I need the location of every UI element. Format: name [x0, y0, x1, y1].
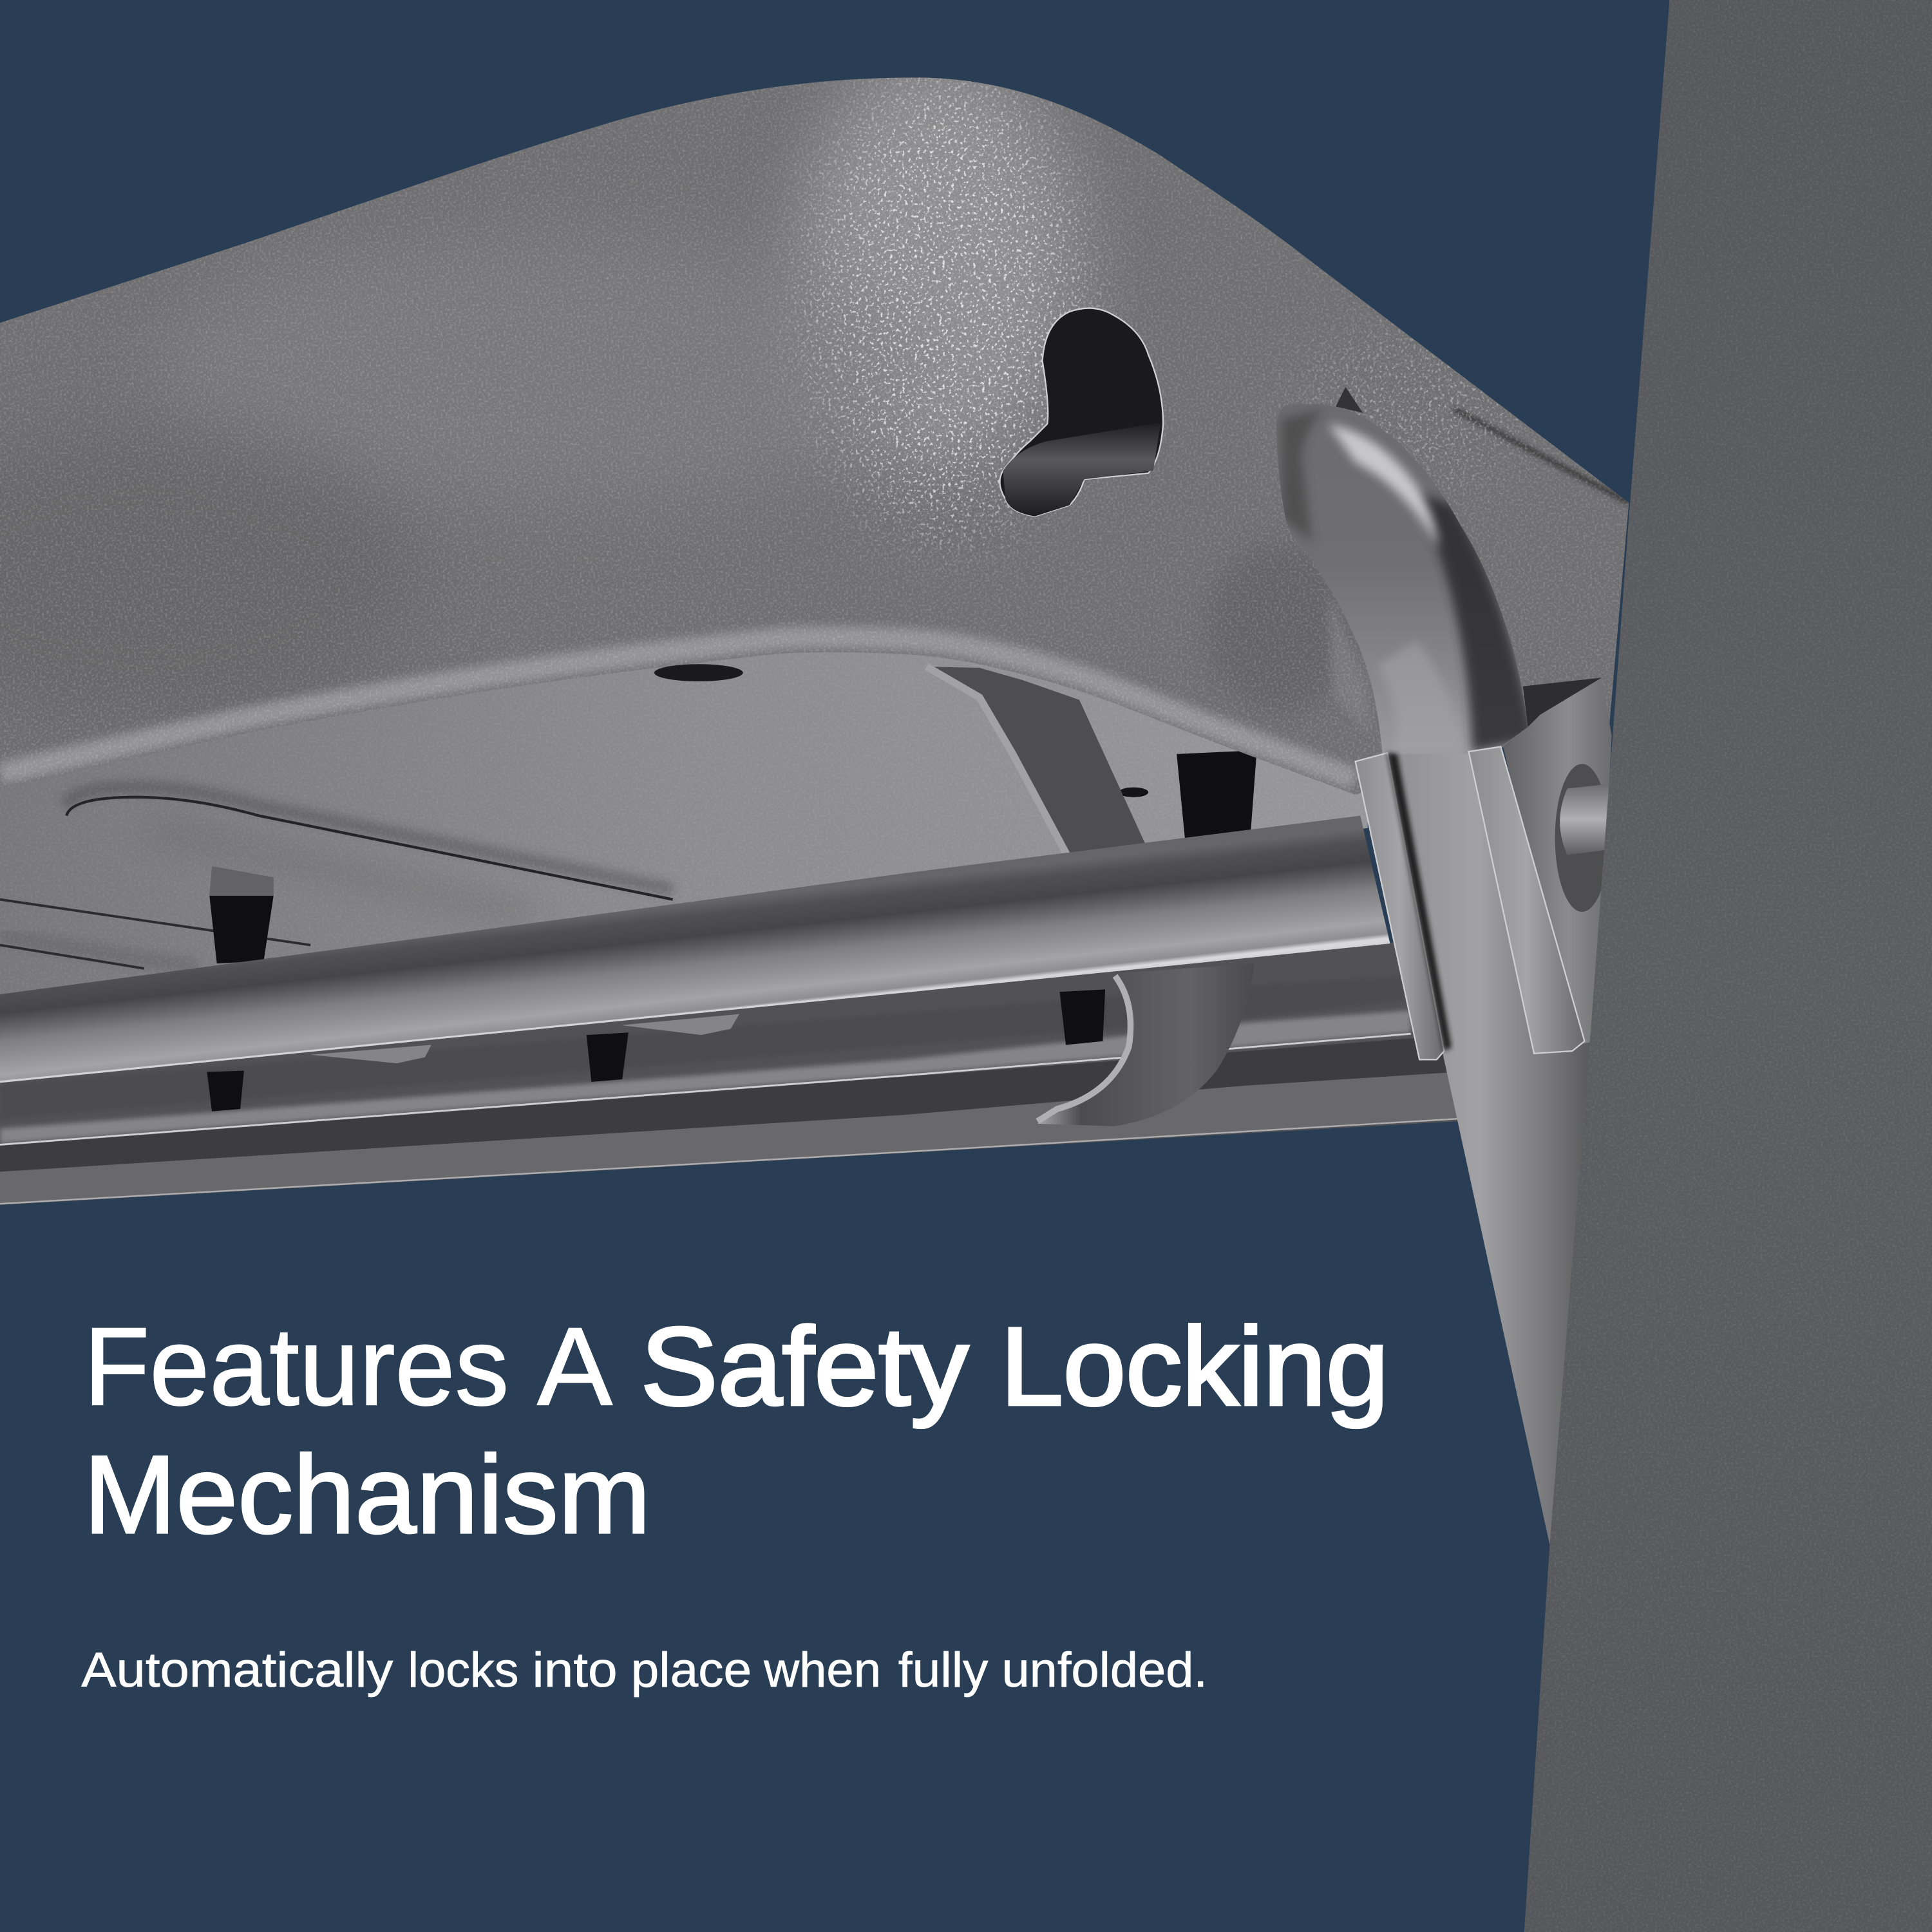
small tab behind handle: [1336, 387, 1363, 413]
heading: A: [537, 1305, 612, 1428]
embossed plate ribs: [0, 797, 673, 969]
lower hook: [1037, 963, 1255, 1126]
description: Automatically: [81, 1643, 393, 1698]
description: fully: [898, 1643, 989, 1698]
rubber peg shadows and small slot: [209, 664, 1148, 896]
textured top bracket: [0, 77, 1629, 795]
left leg flange: [1356, 753, 1444, 1059]
description: locks: [408, 1643, 518, 1698]
hinge plate: [1503, 677, 1612, 1051]
upper wishbone bracket: [927, 667, 1146, 855]
lower rail assembly: [0, 936, 1466, 1205]
heading: Locking: [1001, 1305, 1388, 1428]
dark gap shadow between flange and leg: [1387, 753, 1452, 1051]
description: [81, 1643, 1208, 1698]
curved locking handle: [1276, 404, 1534, 754]
pivot pin: [1555, 764, 1612, 912]
heading: Features: [84, 1305, 509, 1428]
heading: Safety: [641, 1305, 969, 1428]
underside plate: [0, 652, 1368, 994]
right grey panel: [1515, 0, 1932, 1932]
lower tube strip fragments: [310, 1014, 739, 1063]
description: unfolded.: [1001, 1643, 1208, 1698]
main round tube: [0, 816, 1390, 1082]
heading: Mechanism: [84, 1433, 650, 1557]
lower leg: [1383, 752, 1596, 1553]
keyhole slot in bracket: [999, 308, 1163, 516]
rubber pegs: [207, 750, 1257, 1112]
heading: [84, 1305, 1388, 1557]
right leg flange: [1469, 746, 1584, 1054]
description: when: [763, 1643, 881, 1698]
description: place: [631, 1643, 752, 1698]
description: into: [533, 1643, 618, 1698]
